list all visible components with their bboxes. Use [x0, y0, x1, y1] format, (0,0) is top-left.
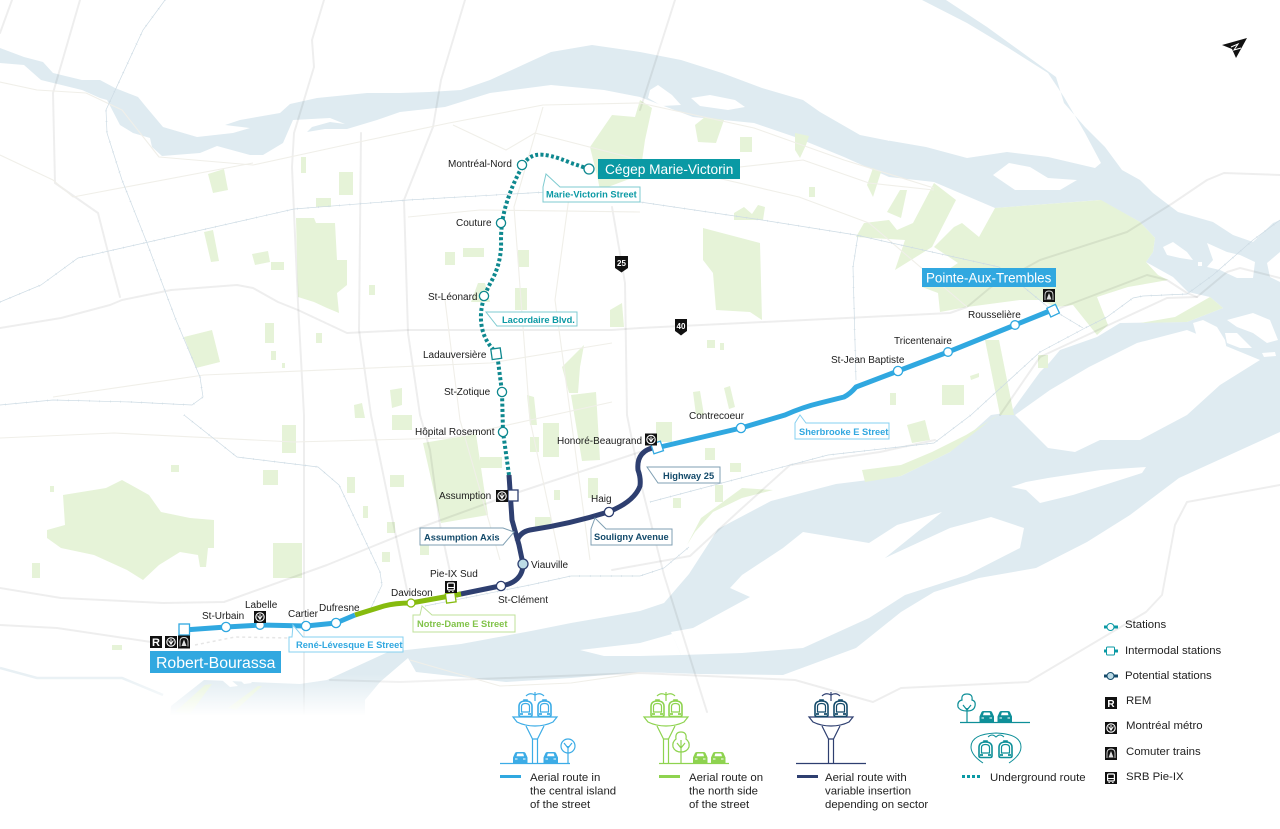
station: Viauville: Viauville [531, 560, 568, 571]
icon: north side pylon [644, 692, 729, 764]
station: Hôpital Rosemont: Hôpital Rosemont [415, 427, 495, 438]
station: Honoré-Beaugrand: Honoré-Beaugrand [557, 436, 642, 447]
route: central island west [184, 615, 355, 630]
text: variable insertion [825, 786, 911, 798]
station: St-Zotique: St-Zotique [444, 387, 491, 398]
text: of the street [530, 799, 591, 811]
station: St-Jean Baptiste: St-Jean Baptiste [831, 355, 905, 366]
station: Pie-IX Sud [430, 569, 478, 603]
callout: Marie-Victorin Street: Marie-Victorin Street [546, 190, 637, 200]
callout: Marie-Victorin Street [543, 174, 640, 202]
dashed bridge [195, 637, 290, 645]
station: Rousselière [968, 310, 1021, 329]
callout: Highway 25: Highway 25 [663, 471, 714, 481]
text: the north side [689, 786, 758, 798]
north arrow [1222, 38, 1247, 58]
railways [0, 0, 1280, 612]
callout: René-Lévesque E Street [289, 625, 403, 652]
callout: Lacordaire Blvd.: Lacordaire Blvd. [502, 315, 575, 325]
legend item: commuter trains: Comuter trains [1126, 746, 1201, 758]
legend item: SRB Pie-IX [1105, 771, 1184, 784]
station: Contrecoeur [689, 411, 746, 433]
highway shield 40: 40 [677, 322, 686, 331]
station: Rousselière: Rousselière [968, 310, 1021, 321]
fade of the map base [0, 674, 470, 716]
station: St-Jean Baptiste [831, 355, 905, 376]
station: Assumption [439, 490, 518, 502]
stations [150, 159, 1059, 649]
icon: central pylon [500, 692, 575, 764]
station: Davidson [391, 588, 433, 607]
legend: aerial central island [500, 692, 616, 811]
legend item: Montréal métro: Montréal métro [1126, 720, 1203, 732]
callout: René-Lévesque E Street: René-Lévesque E Street [296, 640, 402, 650]
station: Honoré-Beaugrand [557, 434, 663, 454]
swatch [500, 775, 521, 778]
text: the central island [530, 786, 616, 798]
swatch [659, 775, 680, 778]
text: Aerial route with [825, 772, 907, 784]
text: Underground route [990, 772, 1086, 784]
station: Assumption: Assumption [439, 491, 491, 502]
highway shield 40 [675, 319, 687, 336]
legend: aerial variable insertion [796, 692, 928, 811]
station: Robert-Bourassa: R [152, 637, 160, 649]
callout: Highway 25 [647, 467, 720, 483]
callout: Souligny Avenue: Souligny Avenue [594, 532, 669, 542]
text: Aerial route in [530, 772, 600, 784]
station: Couture: Couture [456, 218, 492, 229]
highway shield 25: 25 [617, 259, 626, 268]
station: Labelle: Labelle [245, 600, 278, 611]
callout: Sherbrooke E Street [795, 415, 889, 439]
route: underground [481, 155, 589, 475]
station: Haig: Haig [591, 494, 612, 505]
callout: Lacordaire Blvd. [486, 312, 577, 326]
callout: Assumption Axis [420, 528, 514, 545]
station: St-Clément: St-Clément [498, 595, 548, 606]
icon: underground tunnel [958, 694, 1030, 763]
station: Haig [591, 494, 614, 517]
legend item: potential stations: Potential stations [1125, 670, 1212, 682]
terminus label: Pointe-Aux-Trembles: Pointe-Aux-Trembles [926, 270, 1052, 286]
callout: Notre-Dame E Street [413, 606, 515, 632]
callout: Souligny Avenue [591, 518, 672, 545]
callout: Notre-Dame E Street: Notre-Dame E Street [417, 619, 507, 629]
station: Labelle [245, 600, 278, 629]
swatch [962, 775, 982, 778]
station: Pie-IX Sud: Pie-IX Sud [430, 569, 478, 580]
station: St-Léonard: St-Léonard [428, 292, 477, 303]
station: Ladauversière [423, 348, 502, 361]
station: St-Urbain [202, 611, 244, 632]
route: central island east [656, 310, 1052, 448]
station: St-Urbain: St-Urbain [202, 611, 244, 622]
terminus label: Cégep Marie-Victorin: Cégep Marie-Victorin [605, 162, 733, 177]
text: Aerial route on [689, 772, 763, 784]
legend item: REM: REM [1126, 695, 1151, 707]
legend item: stations [1104, 619, 1166, 631]
route: north side [355, 594, 461, 615]
station: Tricentenaire: Tricentenaire [894, 336, 952, 347]
route: Souligny branch [517, 447, 657, 541]
legend item: REM [1105, 695, 1151, 710]
legend: symbols [1104, 619, 1222, 784]
legend: aerial north side [644, 692, 763, 811]
legend item: commuter trains [1105, 746, 1201, 760]
text: depending on sector [825, 799, 928, 811]
station: Dufresne [319, 603, 360, 628]
station: St-Clément [496, 581, 548, 606]
text: of the street [689, 799, 750, 811]
station: Tricentenaire [894, 336, 952, 356]
station: Contrecoeur: Contrecoeur [689, 411, 745, 422]
legend item: intermodal stations: Intermodal stations [1125, 645, 1222, 657]
legend item: SRB Pie-IX: SRB Pie-IX [1126, 771, 1184, 783]
route: variable insertion [456, 475, 523, 595]
legend item: stations: Stations [1125, 619, 1166, 631]
port piers [216, 674, 238, 687]
terminus label: Cégep Marie-Victorin [598, 159, 740, 179]
canal [0, 668, 163, 695]
station: Cartier: Cartier [288, 609, 319, 620]
station: Cartier [288, 609, 319, 631]
station: Ladauversière: Ladauversière [423, 350, 487, 361]
river islands [216, 85, 1280, 687]
swatch [797, 775, 818, 778]
station: Pointe-Aux-Trembles [1043, 289, 1059, 317]
legend item: Montréal métro [1105, 720, 1203, 734]
station: Cégep Marie-Victorin [584, 164, 594, 174]
station: Viauville [518, 559, 568, 571]
terminus label: Robert-Bourassa: Robert-Bourassa [156, 655, 276, 672]
station: Dufresne: Dufresne [319, 603, 360, 614]
callout: Assumption Axis: Assumption Axis [424, 532, 500, 542]
callout: Sherbrooke E Street: Sherbrooke E Street [799, 427, 888, 437]
station: Davidson: Davidson [391, 588, 433, 599]
parks [32, 100, 1223, 714]
station: Montréal-Nord: Montréal-Nord [448, 159, 512, 170]
station: Robert-Bourassa [150, 624, 190, 649]
legend item: REM: R [1107, 699, 1115, 710]
icon: variable pylon [796, 692, 866, 764]
legend: underground [958, 694, 1086, 784]
highway shield 25 [615, 256, 628, 272]
